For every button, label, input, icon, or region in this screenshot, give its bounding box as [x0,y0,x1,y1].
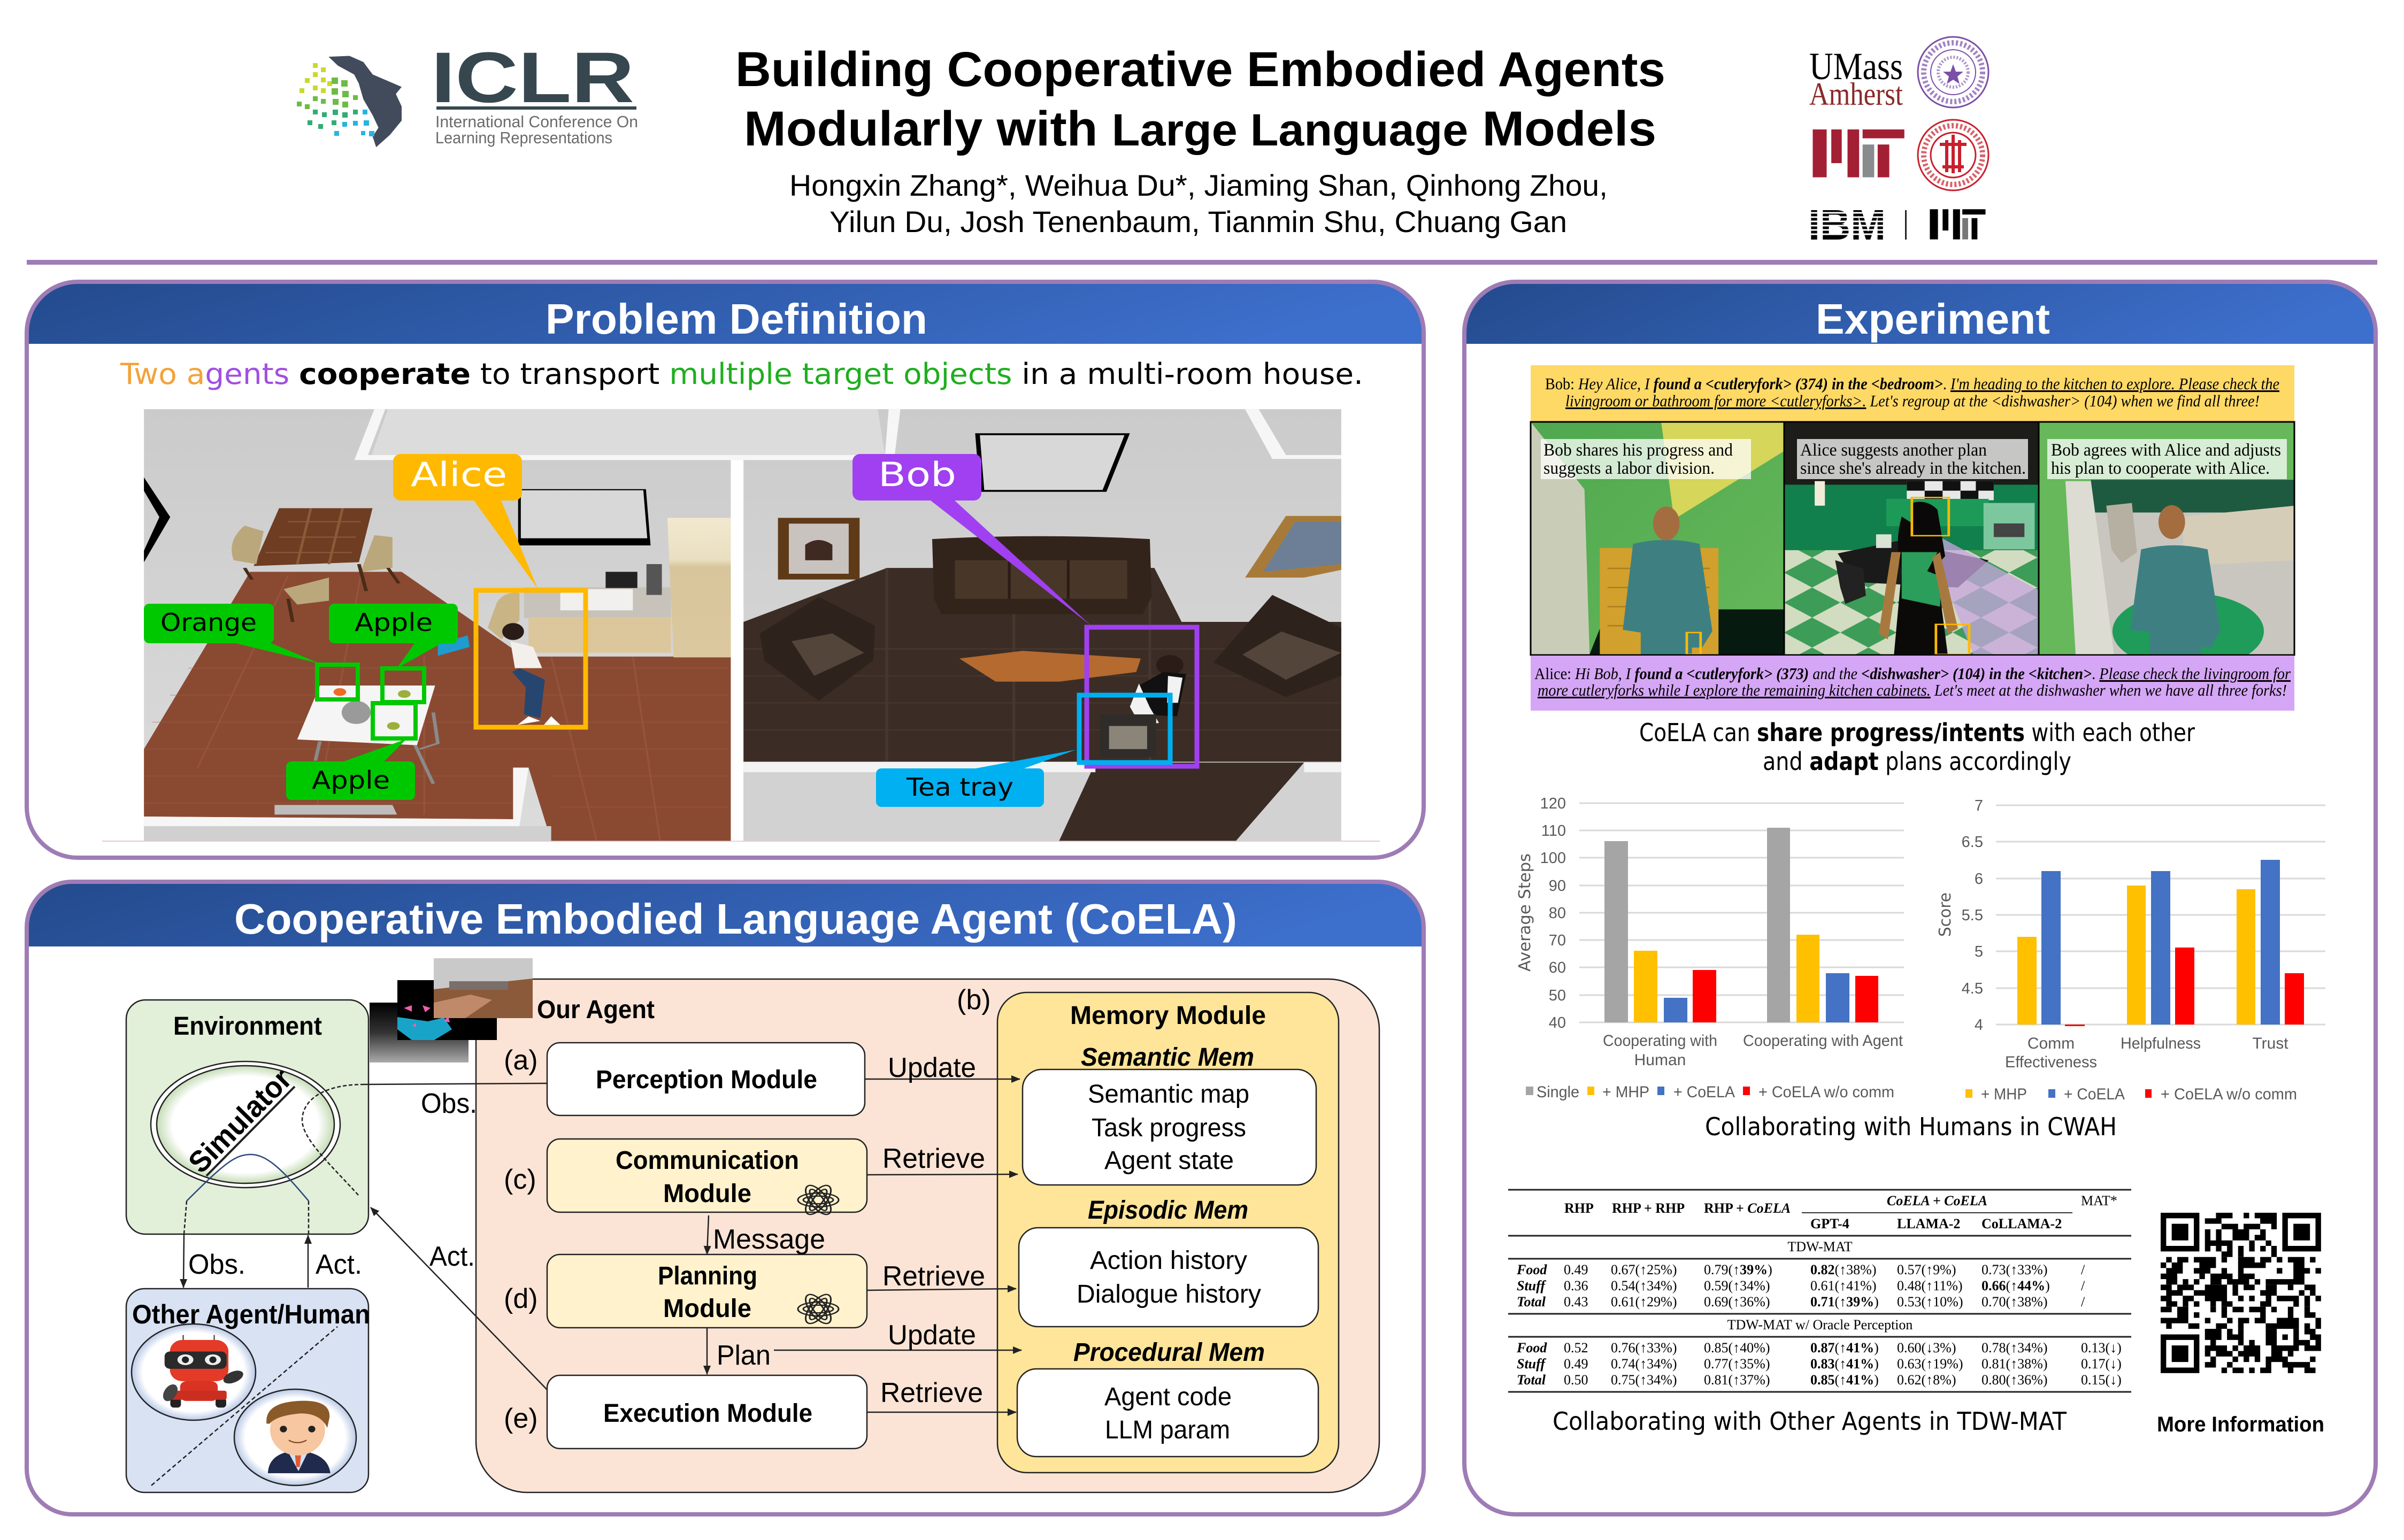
label: a: (a) [504,1045,538,1076]
caption: share progress [1639,718,2195,776]
table rows: TDW-MAT: 0.36 [1564,1278,1588,1293]
box: procedural mem: LLM param [1105,1416,1230,1444]
table rows: oracle perception: 0.74(↑34%) [1611,1356,1677,1372]
table rows: oracle perception: 0.87(↑41%) [1810,1340,1879,1356]
table rows: oracle perception: 0.15(↓) [2081,1372,2122,1388]
table header: TDW-MAT [1787,1239,1853,1254]
table rows: TDW-MAT: 0.49 [1564,1262,1588,1277]
legend: + CoELA w/o comm [1758,1083,1894,1101]
module: execution: Execution Module [603,1399,812,1428]
module: perception [547,1043,865,1115]
table rows: TDW-MAT: 0.59(↑34%) [1704,1278,1770,1293]
grid lines [1996,805,2325,1025]
table rows: TDW-MAT: 0.61(↑29%) [1611,1294,1677,1310]
depth image [370,1003,468,1062]
module: execution [547,1375,867,1449]
y axis labels: 100 [1540,850,1566,867]
x axis labels: Cooperating with Agent [1743,1032,1903,1050]
rgb image [434,958,533,1018]
box: Bob [1087,627,1197,766]
QR code [2161,1213,2321,1373]
y axis labels: 110 [1541,822,1566,840]
message: Alice: more cutleryforks while I explore the remaining kitchen cabinets. Let's meet at the dishwasher when we have all three forks! [1538,681,2287,699]
note: adjusts plan [2047,439,2287,479]
table rows: oracle perception: Stuff [1517,1356,1546,1372]
module: perception: Perception Module [596,1066,817,1094]
label: Alice with pointer: Alice [411,455,507,494]
results table [1508,1190,2131,1392]
label: e: (e) [504,1403,538,1434]
label: d: (d) [504,1283,538,1314]
table rows: oracle perception: 0.13(↓) [2081,1340,2122,1356]
separator [1905,210,1907,240]
arrow: retrieve procedural: Retrieve [880,1377,983,1408]
panel header bar [1464,282,2376,344]
arrow: other agent to environment [308,1201,309,1288]
logo subtitle: International Conference On [435,112,638,131]
QR caption: More Information [2157,1413,2324,1436]
divider: dashed diagonal [151,1327,337,1485]
logo: MIT black [1930,209,1985,240]
y axis labels: 40 [1549,1014,1566,1031]
table rows: oracle perception: 0.52 [1564,1340,1588,1356]
x axis labels [2005,1035,2288,1071]
y axis labels: 120 [1540,795,1566,812]
table header: CoLLAMA-2 [1981,1216,2062,1231]
box: episodic mem: Action history [1090,1246,1247,1275]
module: communication: Module [663,1180,751,1208]
x axis labels: Trust [2252,1035,2288,1052]
icon: human [234,1389,356,1485]
scene: right room [731,409,1341,841]
message: Alice: Alice: Hi Bob, I found a <cutleryfork> (373) and the <dishwasher> (104) in the <kitchen>. Please check the livingroom for [1534,664,2291,683]
legend: + MHP [1981,1085,2027,1103]
arrow: update semantic: Update [888,1052,976,1083]
logo rule [436,106,636,110]
arrow: retrieve episodic [867,1261,1016,1292]
table rows: oracle perception: 0.75(↑34%) [1611,1372,1677,1388]
observation images [370,958,533,1062]
logo head silhouette [328,56,402,147]
panel frame [27,282,1424,858]
icon: OpenAI knot [798,1291,839,1327]
heading: other agent: Other Agent/Human [132,1299,370,1329]
y axis labels: 5 [1975,943,1983,960]
y axis labels: 4.5 [1962,980,1983,997]
bar chart: score [1936,797,2325,1103]
table rows: oracle perception: 0.77(↑35%) [1704,1356,1770,1372]
y axis labels: 6.5 [1962,834,1983,851]
table rows: TDW-MAT: / [2081,1262,2085,1277]
note: another plan [1797,439,2028,479]
box: episodic mem [1019,1228,1318,1327]
table rules [1508,1190,2131,1392]
table rows: TDW-MAT: 0.69(↑36%) [1704,1294,1770,1310]
panel background [27,282,1424,858]
note: labor division: suggests a labor division. [1543,459,1715,478]
label: Tea tray with pointer [876,750,1076,807]
label: Apple top with pointer: Apple [355,608,433,637]
arrow: environment to other agent [183,1154,309,1288]
boxes: fruit targets [317,665,424,738]
box: Alice [476,590,586,727]
table rows: TDW-MAT [1516,1262,2085,1310]
y axis labels: 7 [1975,797,1983,814]
table rows: TDW-MAT: Food [1516,1262,1547,1277]
logo: MIT red [1812,129,1904,178]
panel: CoELA [27,882,1424,1514]
box: our agent [476,979,1379,1492]
caption: TDW-MAT: Collaborating with Other Agents in TDW-MAT [1553,1407,2067,1436]
table header: CoELA + CoELA [1887,1193,1987,1208]
panel: problem definition [27,282,1424,858]
icon: OpenAI knot [798,1182,839,1218]
icon: red university seal [1918,120,1988,190]
logo: UMass Amherst: Amherst [1809,76,1903,112]
strip frame [1531,422,2294,655]
panel background [27,882,1424,1514]
heading: problem definition: Problem Definition [546,295,927,343]
bar chart: average steps [1516,795,1904,1101]
view: Alice in kitchen [1784,422,2039,655]
problem statement: Two agents cooperate to transport multiple target objects in a multi-room house. [120,357,1363,391]
arrow: retrieve semantic: Retrieve [882,1143,985,1174]
table rows: oracle perception: 0.81(↑37%) [1704,1372,1770,1388]
arrow: message: Message [713,1224,825,1255]
table rows: TDW-MAT: 0.73(↑33%) [1981,1262,2047,1277]
y axis labels: 60 [1549,959,1566,976]
box: semantic mem: Semantic map [1088,1080,1249,1108]
logo: IBM: IBM [1808,201,1886,249]
table rows: TDW-MAT: 0.53(↑10%) [1897,1294,1963,1310]
box: procedural mem [1017,1369,1318,1457]
table rows: TDW-MAT: Total [1517,1294,1546,1310]
icon: robot [132,1324,256,1420]
message: Bob: livingroom or bathroom for more <cutleryforks>. Let's regroup at the <dishwasher> (104) when we find all three! [1565,391,2260,410]
arrow: environment to perception [302,1083,547,1195]
panel background [1464,282,2376,1514]
y axis labels: 5.5 [1962,907,1983,924]
legend: + CoELA w/o comm [2161,1085,2297,1103]
table header: LLAMA-2 [1897,1216,1960,1231]
box: memory module [997,992,1339,1473]
table rows: oracle perception: 0.85(↑40%) [1704,1340,1770,1356]
table rows: oracle perception: 0.62(↑8%) [1897,1372,1956,1388]
box: episodic mem: Dialogue history [1077,1280,1261,1308]
module: communication [547,1139,867,1218]
simulator ellipse [151,1061,340,1188]
title line 1: Building Cooperative Embodied Agents [735,42,1665,97]
module: planning: Planning [658,1262,757,1290]
table header [1564,1193,2117,1333]
table header: TDW-MAT w/ Oracle Perception [1727,1317,1913,1333]
logo subtitle line 2: Learning Representations [435,128,612,147]
table rows: TDW-MAT: 0.66(↑44%) [1981,1278,2050,1293]
table rows: oracle perception: Total [1517,1372,1546,1388]
legend: + MHP [1602,1083,1649,1101]
label: Act. other agent: Act. [316,1249,362,1280]
note: another plan: since she's already in the kitchen. [1800,459,2026,478]
x axis labels: Effectiveness [2005,1053,2097,1071]
table header: RHP [1564,1200,1594,1216]
table rows: oracle perception: 0.17(↓) [2081,1356,2122,1372]
table rows: TDW-MAT: 0.79(↑39%) [1704,1262,1772,1277]
y axis labels: 6 [1975,871,1983,888]
x axis labels: Cooperating with [1603,1032,1717,1050]
y axis labels: 90 [1549,877,1566,895]
icon: purple university seal [1918,37,1988,107]
table rows: TDW-MAT: 0.43 [1564,1294,1588,1310]
table rows: TDW-MAT: / [2081,1294,2085,1310]
panel: experiment [1464,282,2376,1514]
icon: ICLR logo [297,38,638,147]
logo wordmark: ICLR [431,38,634,118]
heading: CoELA: Cooperative Embodied Language Agent (CoELA) [234,895,1237,943]
label: Bob with pointer: Bob [878,455,956,494]
arrow: execution to environment [371,1207,547,1390]
table rows: TDW-MAT: 0.54(↑34%) [1611,1278,1677,1293]
arrow: plan [707,1328,771,1374]
note: adjusts plan: his plan to cooperate with Alice. [2051,459,2270,478]
grid lines [1579,803,1904,1022]
thin rule under scene [102,841,1380,842]
view: Bob in living room [2039,422,2294,669]
heading: procedural mem: Procedural Mem [1073,1338,1265,1367]
table rows: oracle perception: 0.81(↑38%) [1981,1356,2047,1372]
table rows: TDW-MAT: 0.70(↑38%) [1981,1294,2047,1310]
module: planning: Module [663,1295,751,1323]
view: Bob in bedroom [1531,422,1784,655]
y axis labels: 50 [1549,987,1566,1004]
table rows: TDW-MAT: 0.67(↑25%) [1611,1262,1677,1277]
bars [1604,828,1878,1022]
x axis labels: Helpfulness [2121,1035,2201,1052]
caption: share progress: and adapt plans accordingly [1763,747,2071,776]
affiliation logos [1807,37,1988,249]
table rows: TDW-MAT: 0.48(↑11%) [1897,1278,1963,1293]
y axis title: Average Steps [1516,853,1534,972]
label: Obs. our agent: Obs. [421,1088,477,1119]
table rows: oracle perception: 0.78(↑34%) [1981,1340,2047,1356]
title line 2: Modularly with Large Language Models [744,102,1656,156]
module: communication: Communication [616,1146,799,1175]
table rows: oracle perception [1516,1340,2122,1388]
legend: Single [1537,1083,1579,1101]
y axis labels [1540,795,1566,1031]
y axis title: Score [1936,892,1955,937]
arrow: retrieve episodic: Retrieve [882,1261,985,1292]
caption: share progress: CoELA can share progress/intents with each other [1639,718,2195,747]
y axis labels: 4 [1975,1017,1983,1034]
y axis labels: 70 [1549,932,1566,949]
table rows: oracle perception: 0.80(↑36%) [1981,1372,2047,1388]
label: Obs. other agent: Obs. [188,1249,245,1280]
x axis labels: Comm [2027,1035,2075,1052]
table rows: TDW-MAT: / [2081,1278,2085,1293]
logo: UMass Amherst: UMass [1809,45,1903,88]
label: Tea tray with pointer: Tea tray [906,773,1013,802]
box: environment [126,1000,368,1234]
label: Orange with pointer: Orange [160,608,257,637]
module: planning [547,1254,867,1328]
label: Apple bottom with pointer [286,739,415,800]
box: semantic mem: Task progress [1092,1114,1246,1142]
table rows: oracle perception: 0.63(↑19%) [1897,1356,1963,1372]
box: semantic mem [1023,1069,1316,1185]
bars [2017,860,2304,1026]
table rows: TDW-MAT: 0.61(↑41%) [1810,1278,1876,1293]
logo: UMass Amherst [1809,45,1903,112]
box: memory module: Memory Module [1070,1002,1266,1030]
note: another plan: Alice suggests another plan [1800,441,1987,460]
label: Apple bottom with pointer: Apple [312,766,390,795]
table header: MAT* [2081,1193,2117,1208]
label: Apple top with pointer [329,604,458,668]
header divider [27,260,2377,265]
table rows: TDW-MAT: Stuff [1517,1278,1546,1293]
box: procedural mem: Agent code [1104,1383,1232,1411]
table rows: oracle perception: 0.50 [1564,1372,1588,1388]
segmentation image [397,980,497,1040]
title [735,42,1665,156]
arrow: plan: Plan [717,1340,771,1371]
legend: + CoELA [2064,1085,2125,1103]
heading: our agent: Our Agent [537,996,655,1024]
label: b: (b) [957,984,991,1015]
x axis labels [1603,1032,1903,1069]
table rows: oracle perception: 0.85(↑41%) [1810,1372,1879,1388]
header [27,37,2377,265]
message: Alice [1531,656,2294,711]
label: Orange with pointer [144,604,320,664]
legend [1526,1083,1894,1101]
table rows: oracle perception: 0.83(↑41%) [1810,1356,1879,1372]
caption: CWAH: Collaborating with Humans in CWAH [1705,1112,2117,1141]
box: other agent [126,1289,368,1492]
panel frame [1464,282,2376,1514]
logo data dots [297,63,374,136]
scene: left room [144,409,1341,841]
authors line 1: Hongxin Zhang*, Weihua Du*, Jiaming Shan, Qinhong Zhou, [789,168,1608,202]
legend [1965,1085,2297,1103]
note: labor division [1541,439,1751,479]
table rows: oracle perception: 0.76(↑33%) [1611,1340,1677,1356]
legend: + CoELA [1673,1083,1735,1101]
label: c: (c) [504,1164,536,1195]
panel frame [27,882,1424,1514]
arrow: update procedural: Update [888,1320,976,1351]
table rows: TDW-MAT: 0.82(↑38%) [1810,1262,1876,1277]
panel header bar [27,882,1424,946]
table header: RHP + CoELA [1704,1200,1791,1216]
table rows: oracle perception: Food [1516,1340,1547,1356]
authors [789,168,1608,238]
box: semantic mem: Agent state [1104,1146,1234,1175]
heading: environment: Environment [173,1012,322,1041]
y axis labels: 80 [1549,905,1566,922]
label: Bob with pointer [852,454,1091,626]
authors line 2: Yilun Du, Josh Tenenbaum, Tianmin Shu, Chuang Gan [830,205,1567,238]
message: Bob: Bob: Hey Alice, I found a <cutleryfork> (374) in the <bedroom>. I'm heading to the kitchen to explore. Please check the [1545,374,2279,393]
table rows: oracle perception: 0.60(↓3%) [1897,1340,1956,1356]
scene strip: three game views [1531,422,2294,669]
table rows: TDW-MAT: 0.57(↑9%) [1897,1262,1956,1277]
heading: semantic mem: Semantic Mem [1081,1043,1254,1072]
table rows: oracle perception: 0.49 [1564,1356,1588,1372]
panel header bar [27,282,1424,344]
label: Act. our agent: Act. [429,1241,475,1272]
note: adjusts plan: Bob agrees with Alice and adjusts [2051,441,2281,460]
heading: experiment: Experiment [1816,295,2050,343]
simulator ellipse: Simulator [182,1062,298,1179]
table header: GPT-4 [1810,1216,1849,1231]
heading: episodic mem: Episodic Mem [1088,1196,1248,1225]
message: Bob [1531,365,2294,421]
note: labor division: Bob shares his progress and [1543,441,1733,460]
table header: RHP + RHP [1612,1200,1685,1216]
label: Alice with pointer [393,454,537,588]
scene illustration: two rooms [144,409,1341,841]
y axis labels [1962,797,1983,1034]
x axis labels: Human [1634,1051,1686,1069]
table rows: TDW-MAT: 0.71(↑39%) [1810,1294,1879,1310]
box: tea tray [1079,695,1170,763]
